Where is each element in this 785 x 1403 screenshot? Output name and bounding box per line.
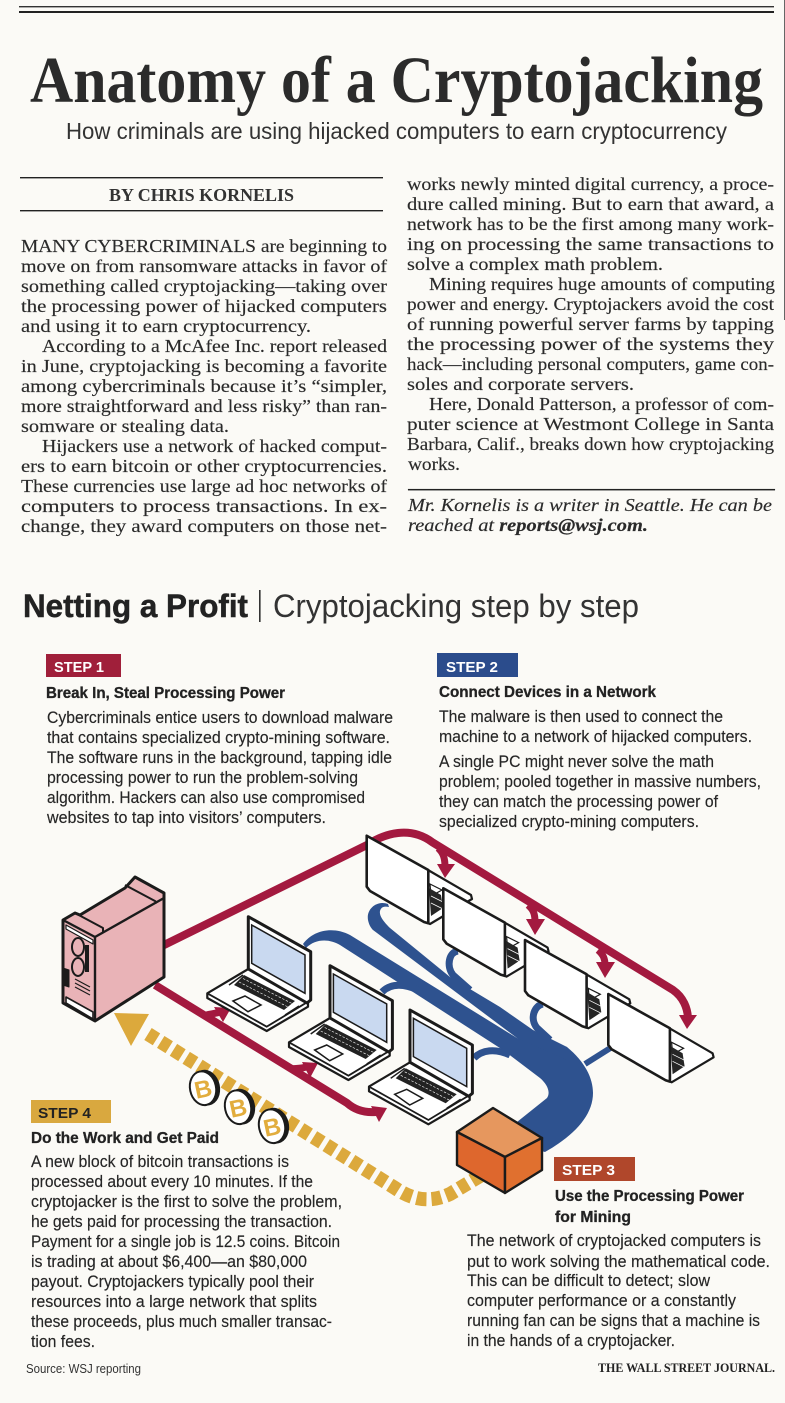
step 2 body: The malware is then used to connect the xyxy=(439,708,723,726)
step 3 body: computer performance or a constantly xyxy=(467,1292,737,1310)
article text: left column: These currencies use large ad hoc networks of xyxy=(21,476,388,496)
step 3 body xyxy=(467,1232,770,1350)
author note: reached at reports@wsj.com. xyxy=(408,515,648,535)
step 2 heading: Connect Devices in a Network xyxy=(439,684,656,701)
step 2 body xyxy=(439,708,761,831)
step 4 body: tion fees. xyxy=(31,1333,95,1351)
step 4 body: he gets paid for processing the transaction. xyxy=(31,1213,332,1231)
author note: Mr. Kornelis is a writer in Seattle. He can be xyxy=(407,495,772,515)
article text: right column: network has to be the first among many work- xyxy=(407,214,774,234)
step 3 body: running fan can be signs that a machine is xyxy=(467,1312,760,1330)
icon: pink computer tower xyxy=(63,877,164,1021)
step 4 heading: Do the Work and Get Paid xyxy=(31,1130,219,1147)
article text: left column: computers to process transactions. In ex- xyxy=(21,496,387,516)
step 3 badge: STEP 3 xyxy=(562,1162,615,1179)
article text: left column: Hijackers use a network of hacked comput- xyxy=(42,436,387,456)
article text: right column: dure called mining. But to earn that award, a xyxy=(407,194,774,214)
icon: hijacked back laptops xyxy=(367,836,714,1082)
step 4 body: Payment for a single job is 12.5 coins. Bitcoin xyxy=(31,1233,340,1251)
step 4 badge: STEP 4 xyxy=(38,1105,92,1122)
article text: left column: the processing power of hijacked computers xyxy=(21,296,387,316)
step 2 body: machine to a network of hijacked computers. xyxy=(439,728,752,746)
article text: right column: works newly minted digital currency, a proce- xyxy=(407,174,774,194)
step 3 heading xyxy=(555,1188,744,1226)
step 4 badge xyxy=(31,1100,111,1123)
source note: Source: WSJ reporting xyxy=(26,1362,141,1376)
step 2 body: problem; pooled together in massive numbers, xyxy=(439,773,761,791)
article text: right column: Mining requires huge amounts of computing xyxy=(429,274,775,294)
step 2 text block xyxy=(437,653,761,831)
article text: left column: change, they award computers on those net- xyxy=(21,516,387,536)
step 3 heading: Use the Processing Power xyxy=(555,1188,744,1205)
step 2 body: they can match the processing power of xyxy=(439,793,718,811)
step 2 badge: STEP 2 xyxy=(446,659,498,676)
red connection lower, tower to laptops xyxy=(155,985,387,1122)
article text: left column: ers to earn bitcoin or other cryptocurrencies. xyxy=(21,456,387,476)
section heading: Cryptojacking step by step xyxy=(273,588,639,624)
step 1 badge: STEP 1 xyxy=(54,659,104,676)
article text: right column: the processing power of the systems they xyxy=(407,334,775,354)
step 3 heading: for Mining xyxy=(555,1209,631,1226)
step 2 body: A single PC might never solve the math xyxy=(439,753,714,771)
step 4 body: these proceeds, plus much smaller transac- xyxy=(31,1313,332,1331)
step 1 text block xyxy=(46,654,393,827)
red connection upper, tower to hijacked machines xyxy=(160,833,697,1029)
article text: left column: MANY CYBERCRIMINALS are beginning to xyxy=(21,236,387,256)
article text: left column xyxy=(21,236,388,536)
icon: orange mining box xyxy=(457,1108,542,1193)
article text: left column: and using it to earn cryptocurrency. xyxy=(21,316,311,336)
icon: bitcoin coins: B xyxy=(227,1094,250,1124)
article text: left column: more straightforward and less risky” than ran- xyxy=(21,396,387,416)
step 1 body: The software runs in the background, tapping idle xyxy=(47,749,392,767)
icon: bitcoin coins xyxy=(187,1067,292,1147)
icon: bitcoin coins: B xyxy=(261,1113,284,1143)
byline: BY CHRIS KORNELIS xyxy=(109,185,294,205)
article text: right column: power and energy. Cryptojackers avoid the cost xyxy=(407,294,774,314)
article text: left column: in June, cryptojacking is becoming a favorite xyxy=(21,356,387,376)
publication credit: THE WALL STREET JOURNAL. xyxy=(598,1360,775,1375)
step 2 body: specialized crypto-mining computers. xyxy=(439,813,699,831)
author note xyxy=(407,489,775,535)
article text: right column: works. xyxy=(408,454,460,474)
step 3 body: in the hands of a cryptojacker. xyxy=(467,1332,675,1350)
article text: left column: somware or stealing data. xyxy=(21,416,229,436)
header rules xyxy=(19,0,785,320)
step 4 body: resources into a large network that splits xyxy=(31,1293,317,1311)
article text: right column: soles and corporate servers. xyxy=(407,374,634,394)
step 3 body: This can be difficult to detect; slow xyxy=(467,1272,710,1290)
article text: right column xyxy=(407,174,775,474)
article text: left column: move on from ransomware attacks in favor of xyxy=(21,256,388,276)
icon: front laptops xyxy=(207,917,472,1124)
step 1 body xyxy=(46,709,393,827)
step 4 body: payout. Cryptojackers typically pool their xyxy=(31,1273,315,1291)
section heading: Netting a Profit xyxy=(23,588,248,624)
yellow dashed payout arrow xyxy=(114,1013,480,1199)
step 4 body: processed about every 10 minutes. If the xyxy=(31,1173,313,1191)
step 1 body: processing power to run the problem-solving xyxy=(47,769,358,787)
blue network connections xyxy=(303,903,612,1152)
article text: left column: According to a McAfee Inc. report released xyxy=(42,336,387,356)
article text: right column: puter science at Westmont College in Santa xyxy=(407,414,774,434)
step 4 body: is trading at about $6,400—an $80,000 xyxy=(31,1253,307,1271)
article text: right column: hack—including personal computers, game con- xyxy=(407,354,774,374)
step 1 body: algorithm. Hackers can also use compromised xyxy=(47,789,365,807)
step 4 text block xyxy=(31,1100,342,1351)
step 1 body: websites to tap into visitors’ computers. xyxy=(46,809,326,827)
step 3 badge xyxy=(554,1157,635,1181)
article text: right column: Barbara, Calif., breaks down how cryptojacking xyxy=(407,434,774,454)
article text: left column: something called cryptojacking—taking over xyxy=(21,276,387,296)
article text: right column: solve a complex math problem. xyxy=(407,254,663,274)
step 1 body: that contains specialized crypto-mining software. xyxy=(47,729,390,747)
step 1 badge xyxy=(46,654,121,677)
step 3 body: put to work solving the mathematical code. xyxy=(467,1253,770,1271)
section heading xyxy=(23,588,639,624)
step 4 body xyxy=(31,1153,342,1351)
step 4 body: A new block of bitcoin transactions is xyxy=(31,1153,289,1171)
article text: right column: of running powerful server farms by tapping xyxy=(407,314,774,334)
article text: right column: ing on processing the same transactions to xyxy=(407,234,774,254)
article text: right column: Here, Donald Patterson, a professor of com- xyxy=(429,394,774,414)
step 3 body: The network of cryptojacked computers is xyxy=(467,1232,761,1250)
step 3 text block xyxy=(467,1157,770,1350)
step 2 badge xyxy=(437,653,518,677)
step 4 body: cryptojacker is the first to solve the problem, xyxy=(31,1193,342,1211)
icon: bitcoin coins: B xyxy=(192,1075,215,1105)
step 1 heading: Break In, Steal Processing Power xyxy=(46,685,285,702)
step 1 body: Cybercriminals entice users to download malware xyxy=(47,709,393,727)
subtitle: How criminals are using hijacked computers to earn cryptocurrency xyxy=(66,118,727,144)
article text: left column: among cybercriminals because it’s “simpler, xyxy=(21,376,387,396)
